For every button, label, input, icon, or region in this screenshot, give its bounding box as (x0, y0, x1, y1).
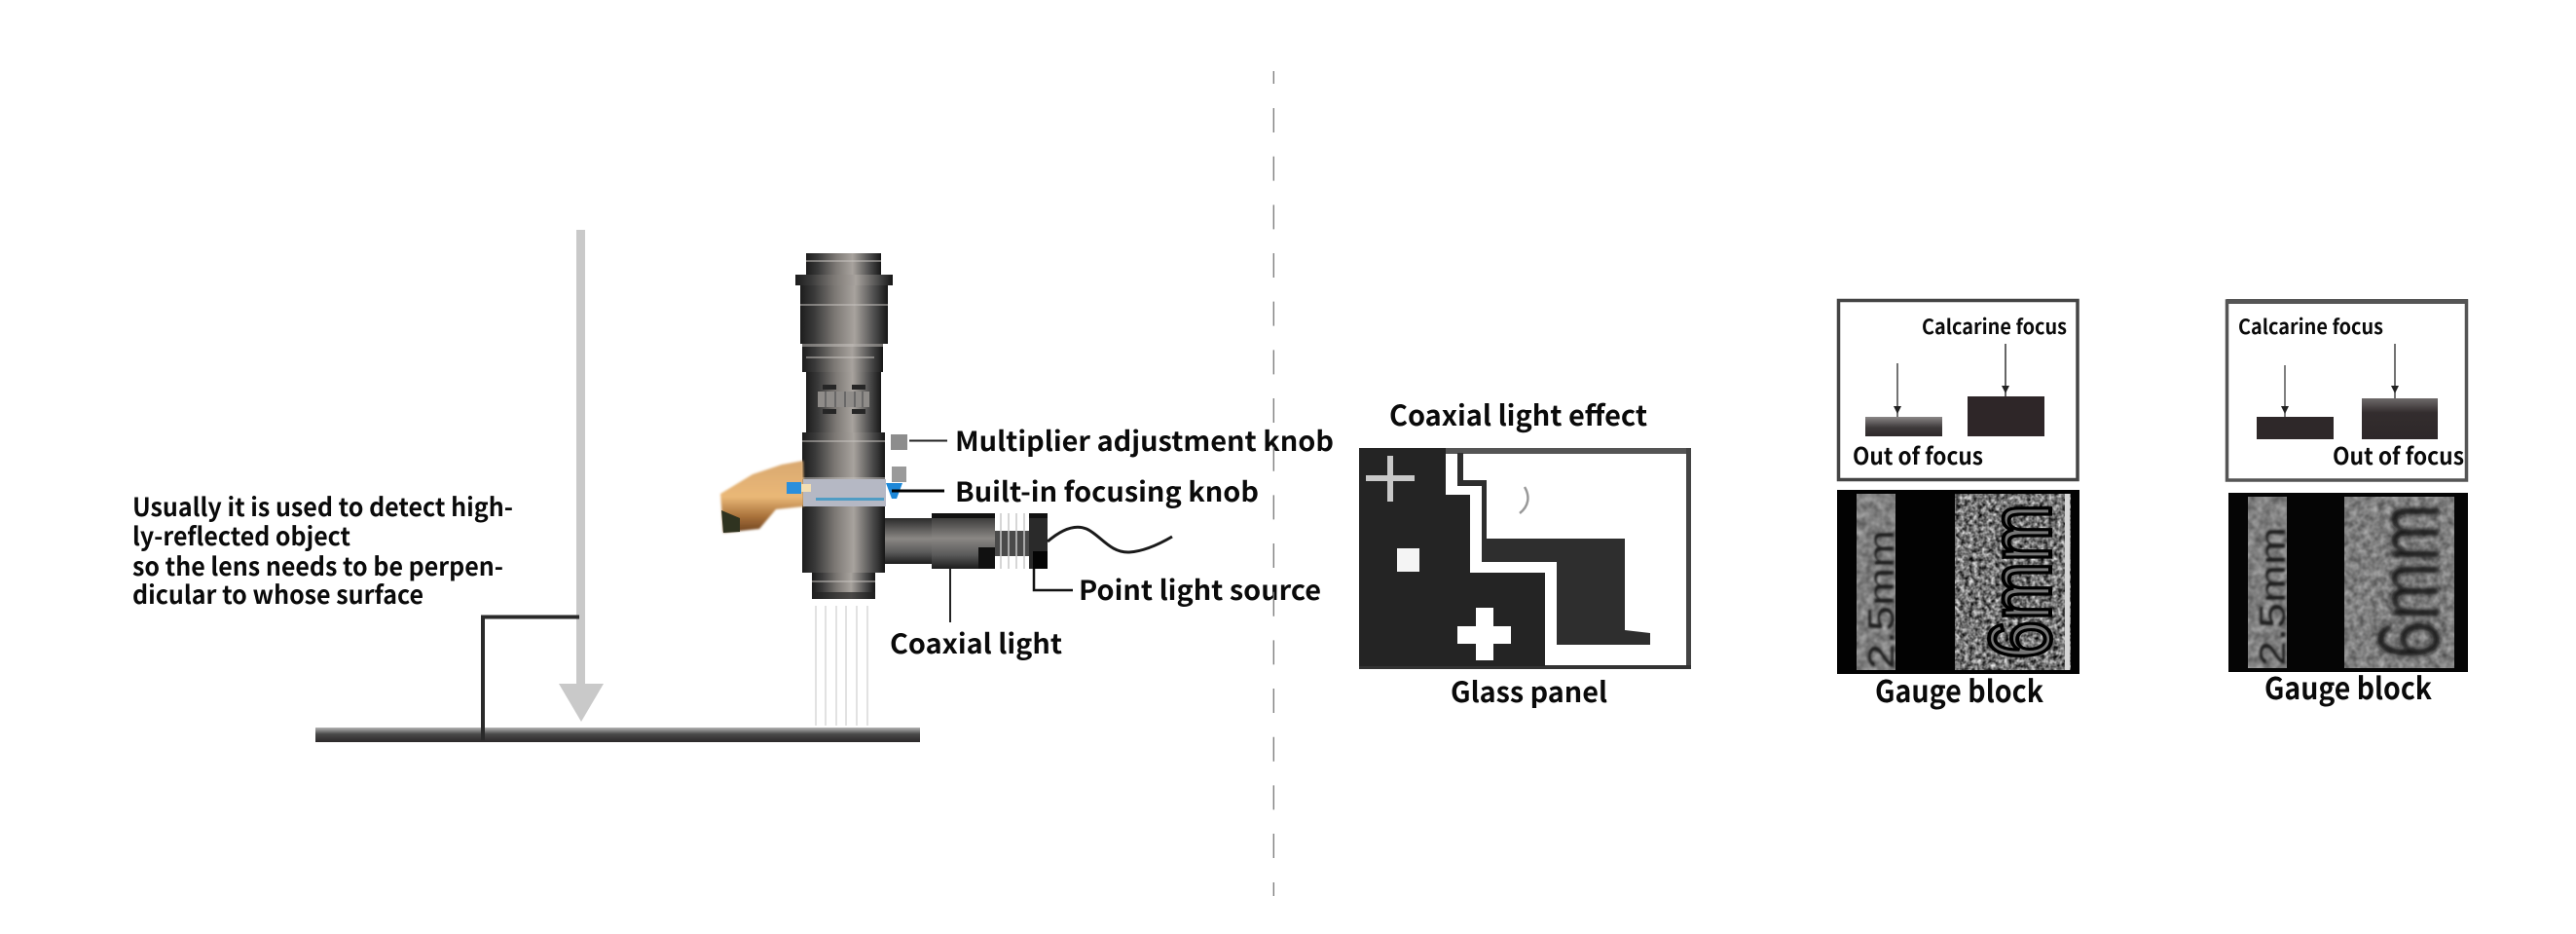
description text (132, 488, 513, 612)
focus diagram right: Calcarine focus (2238, 312, 2383, 341)
panel: left illustration (132, 230, 1334, 742)
icon: focusing knob (892, 467, 906, 482)
panel: glass panel effect (1359, 393, 1691, 711)
focus diagram left (1838, 300, 2078, 479)
label: coaxial light: Coaxial light (890, 623, 1062, 662)
focus diagram right (2226, 299, 2468, 480)
label: gauge block right: Gauge block (2264, 664, 2432, 708)
icon: hand (720, 461, 804, 533)
focus diagram left: Calcarine focus (1922, 312, 2067, 341)
description text: so the lens needs to be perpen- (132, 547, 503, 583)
leader: coaxial light (949, 569, 951, 622)
focusing ring (787, 479, 902, 506)
icon: coaxial light housing (885, 513, 1048, 569)
description text: dicular to whose surface (132, 576, 423, 612)
gauge block photo right: 6mm (2361, 504, 2458, 659)
description text: Usually it is used to detect high- (132, 488, 513, 524)
glass panel photo (1359, 448, 1691, 669)
label: multiplier adjustment knob: Multiplier adjustment knob (955, 421, 1334, 460)
panel: gauge block right (2226, 299, 2468, 708)
gauge block photo left: 2.5mm (1861, 530, 1901, 669)
panel: gauge block left (1837, 300, 2079, 711)
leader: multiplier (909, 440, 947, 442)
focus diagram left: Out of focus (1853, 437, 1983, 471)
label: built-in focusing knob: Built-in focusing knob (955, 471, 1259, 510)
leader: point light (1034, 569, 1073, 590)
focus diagram right: Out of focus (2333, 437, 2464, 471)
gauge block photo left (1837, 490, 2079, 674)
label: gauge block left: Gauge block (1875, 667, 2043, 711)
icon: microscope lens (795, 253, 893, 599)
light rays (816, 606, 867, 726)
gauge block photo left: 6mm (1972, 504, 2070, 659)
label: point light source: Point light source (1079, 570, 1321, 609)
leader: focusing (892, 489, 944, 493)
gauge block photo right (2228, 493, 2468, 672)
base surface (315, 728, 920, 742)
arrow: vertical grey downward (559, 230, 604, 722)
icon: multiplier knob (891, 434, 907, 450)
cable (1048, 527, 1172, 552)
heading: coaxial light effect: Coaxial light effect (1389, 393, 1647, 434)
description text: ly-reflected object (132, 517, 350, 553)
connector line (483, 617, 579, 740)
gauge block photo right: 2.5mm (2253, 527, 2293, 666)
label: glass panel: Glass panel (1451, 670, 1607, 711)
